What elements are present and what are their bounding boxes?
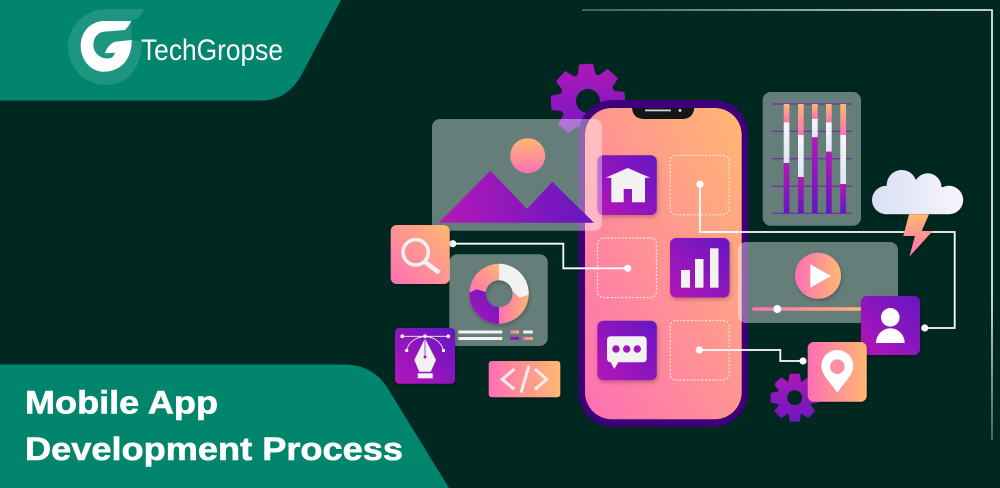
icon: home <box>597 155 657 215</box>
icon: search <box>391 225 450 284</box>
title text <box>25 384 403 467</box>
donut chart <box>469 264 529 324</box>
icon: bar chart <box>670 238 730 298</box>
dashed placeholder boxes <box>598 155 729 380</box>
icon: location pin <box>808 342 867 402</box>
bar 5 <box>840 104 846 213</box>
icon: cloud <box>872 170 963 214</box>
bar 3 <box>812 104 818 213</box>
frame line: top and right <box>582 10 993 440</box>
connector: search to placeholder <box>449 240 631 272</box>
sun <box>510 138 545 173</box>
header panel with logo <box>0 0 341 100</box>
phone <box>578 100 748 427</box>
icon: user <box>861 296 920 355</box>
donut card <box>449 254 548 346</box>
icon: small gear <box>770 374 819 422</box>
mountains <box>439 171 594 223</box>
title text: Mobile App <box>25 384 218 420</box>
logo wordmark: TechGropse <box>141 34 283 67</box>
icon: code <box>489 361 560 397</box>
phone screen <box>585 108 742 419</box>
icon: large gear <box>550 64 625 133</box>
title text: Development Process <box>25 431 403 467</box>
logo mark <box>68 9 143 85</box>
grid lines <box>772 104 852 213</box>
icon: pen tool <box>395 328 455 384</box>
title panel <box>0 364 449 488</box>
connector: placeholder to user <box>696 181 955 332</box>
bar 1 <box>784 104 789 213</box>
play button <box>795 253 841 299</box>
connector: placeholder to location <box>696 346 807 365</box>
stacked bar card <box>763 92 861 226</box>
donut legend <box>458 330 533 340</box>
video progress bar <box>752 305 864 313</box>
video card <box>738 242 898 323</box>
phone notch <box>632 108 694 119</box>
icon: chat bubble <box>597 321 657 380</box>
bar 2 <box>798 104 804 213</box>
icon: lightning bolt <box>903 214 933 257</box>
image card <box>432 119 602 231</box>
bar 4 <box>826 104 832 213</box>
